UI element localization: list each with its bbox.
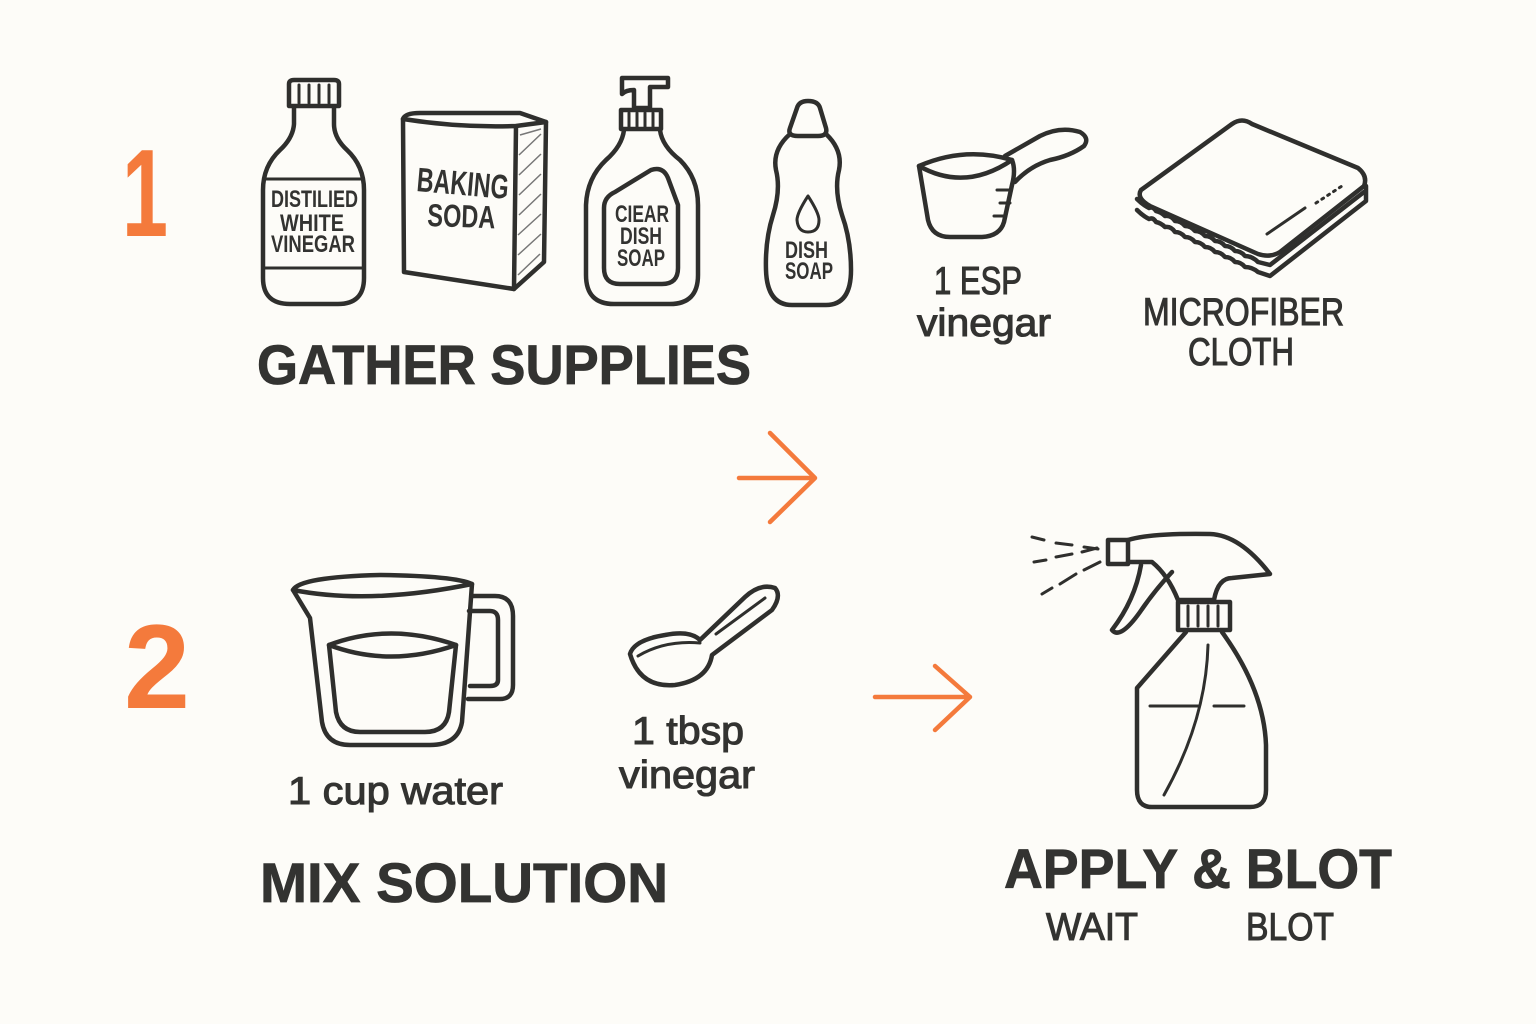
icon: spray bottle xyxy=(1032,534,1270,807)
heading: gather supplies: GATHER SUPPLIES xyxy=(257,333,751,396)
icon: folded microfiber cloth xyxy=(1137,120,1366,276)
label: microfiber cloth: CLOTH xyxy=(1188,331,1294,374)
label: wait: WAIT xyxy=(1046,906,1138,949)
arrow: step 1 to step 2 xyxy=(739,433,815,522)
icon: measuring cup with handle xyxy=(919,130,1086,237)
icon: clear dish soap pump bottle: SOAP xyxy=(617,245,665,272)
label: blot: BLOT xyxy=(1246,906,1334,949)
icon: clear dish soap pump bottle xyxy=(586,78,698,304)
icon: clear dish soap pump bottle: DISH xyxy=(620,223,662,250)
step number 1: 1 xyxy=(122,125,168,263)
step number 2: 2 xyxy=(124,600,190,734)
icon: distilled white vinegar bottle xyxy=(263,80,364,304)
icon: baking soda box: BAKING xyxy=(415,161,510,207)
icon: distilled white vinegar bottle: WHITE xyxy=(280,210,344,237)
label: 1 cup water: 1 cup water xyxy=(288,770,503,813)
heading: mix solution: MIX SOLUTION xyxy=(260,851,668,914)
label: 1 tbsp vinegar xyxy=(619,710,755,797)
icon: dish soap bottle: DISH xyxy=(785,237,828,264)
icon: dish soap bottle: SOAP xyxy=(785,258,833,285)
icon: baking soda box xyxy=(403,113,546,289)
label: microfiber cloth xyxy=(1143,291,1344,374)
label: microfiber cloth: MICROFIBER xyxy=(1143,291,1344,334)
arrow: step 2 to step 3 xyxy=(875,666,970,730)
icon: measuring jug with water xyxy=(293,575,513,745)
icon: distilled white vinegar bottle: DISTILIED xyxy=(271,186,358,213)
label: 1 tbsp vinegar: vinegar xyxy=(619,754,755,797)
label: 1 tsp vinegar: vinegar xyxy=(917,302,1051,345)
icon: clear dish soap pump bottle: CIEAR xyxy=(615,201,669,228)
icon: distilled white vinegar bottle: VINEGAR xyxy=(271,231,355,258)
heading: apply and blot: APPLY & BLOT xyxy=(1004,837,1392,900)
icon: baking soda box: SODA xyxy=(427,197,496,235)
icon: dish soap bottle xyxy=(766,101,851,305)
label: 1 tsp vinegar: 1 ESP xyxy=(934,260,1022,303)
label: 1 tbsp vinegar: 1 tbsp xyxy=(632,710,744,753)
label: 1 tsp vinegar xyxy=(917,260,1051,345)
icon: tablespoon xyxy=(630,587,778,685)
